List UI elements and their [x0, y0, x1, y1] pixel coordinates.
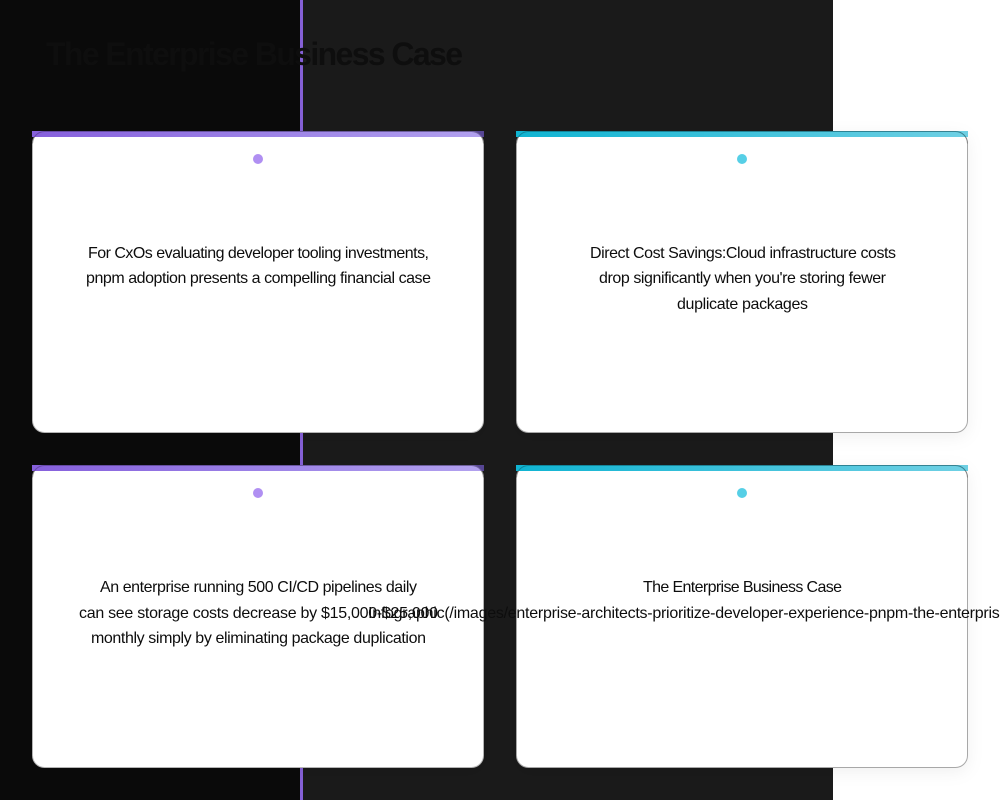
- card 3 accent bar: [32, 465, 484, 471]
- panel: card 2 direct cost savings: [516, 131, 968, 432]
- card 1 text: pnpm adoption presents a compelling financial case: [86, 270, 431, 287]
- card 2 text: drop significantly when you're storing fewer: [599, 270, 887, 287]
- card 4 text: The Enterprise Business Case: [643, 579, 842, 596]
- card 3 text: monthly simply by eliminating package duplication: [91, 630, 426, 647]
- card 1 accent bar: [32, 131, 484, 137]
- card 3 dot: [253, 488, 263, 498]
- card 4 accent bar: [516, 465, 968, 471]
- card 2 text: Direct Cost Savings:Cloud infrastructure costs: [590, 245, 896, 262]
- vertical purple timeline line: [300, 0, 303, 800]
- card 4 dot: [737, 488, 747, 498]
- card 1 text: For CxOs evaluating developer tooling investments,: [88, 245, 429, 262]
- card 3 text: [79, 579, 438, 647]
- panel: card 3 storage savings example: [32, 465, 484, 768]
- card 2 dot: [737, 154, 747, 164]
- panel: card 4 infographic reference: [368, 465, 1000, 768]
- card 1 dot: [253, 154, 263, 164]
- card 2 text: duplicate packages: [677, 296, 808, 313]
- card 3 text: An enterprise running 500 CI/CD pipelines daily: [100, 579, 417, 596]
- card 4 text: [368, 579, 1000, 622]
- panel: card 1 cost case intro: [32, 131, 484, 432]
- card 1 text: [86, 245, 431, 287]
- card 2 text: [590, 245, 896, 313]
- title: The Enterprise Business Case: [46, 36, 463, 72]
- card 2 accent bar: [516, 131, 968, 137]
- card 3 text: can see storage costs decrease by $15,000-$25,000: [79, 605, 438, 622]
